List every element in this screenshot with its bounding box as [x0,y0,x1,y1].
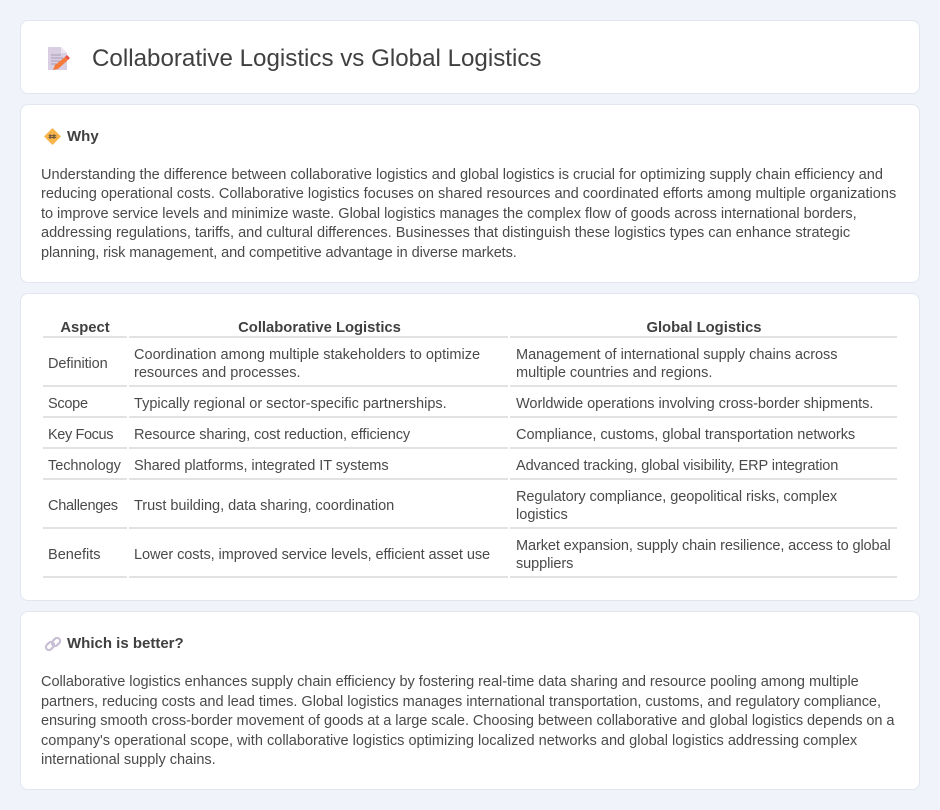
row: definition: Coordination among multiple stakeholders to optimize [134,347,480,363]
text block: which is better: Collaborative logistics enhances supply chain efficiency by fostering real-time data sharing and resource pooling among multiple [41,674,859,690]
row: technology: Shared platforms, integrated IT systems [134,458,389,474]
row: challenges: Challenges [48,498,118,514]
table header: Aspect [60,320,110,336]
text block: why: Understanding the difference between collaborative logistics and global logistics is crucial for optimizing supply chain efficiency and [41,167,883,183]
text block: why: addressing regulations, tariffs, and cultural differences. Businesses that distinguish these logistics types can enhance strategic [41,225,850,241]
row: scope: Scope [48,396,88,412]
heading: why: Why [67,128,99,145]
table header: Global Logistics [646,320,762,336]
icon: memo with pencil [48,47,70,70]
row: key focus [48,427,855,443]
row: technology: Advanced tracking, global visibility, ERP integration [516,458,838,474]
icon: warning diamond [44,128,61,145]
row: benefits: Market expansion, supply chain resilience, access to global [516,538,891,554]
text block: why: to improve service levels and minimize waste. Global logistics manages the complex flow of goods across international borders, [41,206,857,222]
text block: why: reducing operational costs. Collaborative logistics focuses on shared resources and coordinated efforts among multiple organizations [41,186,896,202]
text block: which is better: ensuring smooth cross-border movement of goods at a large scale. Choosing between collaborative and global logistics depends on a [41,713,894,729]
row: benefits [48,538,891,572]
row: definition: Definition [48,356,108,372]
panel: comparison table [20,293,920,601]
table header: Collaborative Logistics [238,320,401,336]
row: definition: multiple countries and regions. [516,365,712,381]
text block: which is better: international supply chains. [41,752,216,768]
row: scope [48,396,873,412]
row: challenges: Regulatory compliance, geopolitical risks, complex [516,489,837,505]
row: key focus: Key Focus [48,427,113,443]
text block: why: planning, risk management, and competitive advantage in diverse markets. [41,245,517,261]
row: technology [48,458,838,474]
row: scope: Typically regional or sector-specific partnerships. [134,396,447,412]
table header [60,320,762,336]
panel: why [20,104,920,283]
row: challenges: Trust building, data sharing, coordination [134,498,394,514]
row: challenges [48,489,837,523]
text block: which is better: company's operational scope, with collaborative logistics optimizing localized networks and global logistics addressing complex [41,733,857,749]
text block: which is better: partners, reducing costs and lead times. Global logistics manages international transportation, customs, and regulatory compliance, [41,694,881,710]
row: definition: Management of international supply chains across [516,347,838,363]
text block: which is better [41,674,894,768]
row: definition [48,347,838,381]
row: technology: Technology [48,458,121,474]
heading: which is better: Which is better? [67,635,184,652]
row: key focus: Compliance, customs, global transportation networks [516,427,855,443]
title: Collaborative Logistics vs Global Logistics [92,45,542,72]
row: scope: Worldwide operations involving cross-border shipments. [516,396,873,412]
row: benefits: suppliers [516,556,573,572]
text block: why [41,167,896,261]
row: key focus: Resource sharing, cost reduction, efficiency [134,427,410,443]
panel: which is better [20,611,920,790]
row: benefits: Benefits [48,547,101,563]
icon: chain link [44,636,62,652]
panel: title header [20,20,920,94]
row: definition: resources and processes. [134,365,301,381]
row: benefits: Lower costs, improved service levels, efficient asset use [134,547,490,563]
row: challenges: logistics [516,507,568,523]
